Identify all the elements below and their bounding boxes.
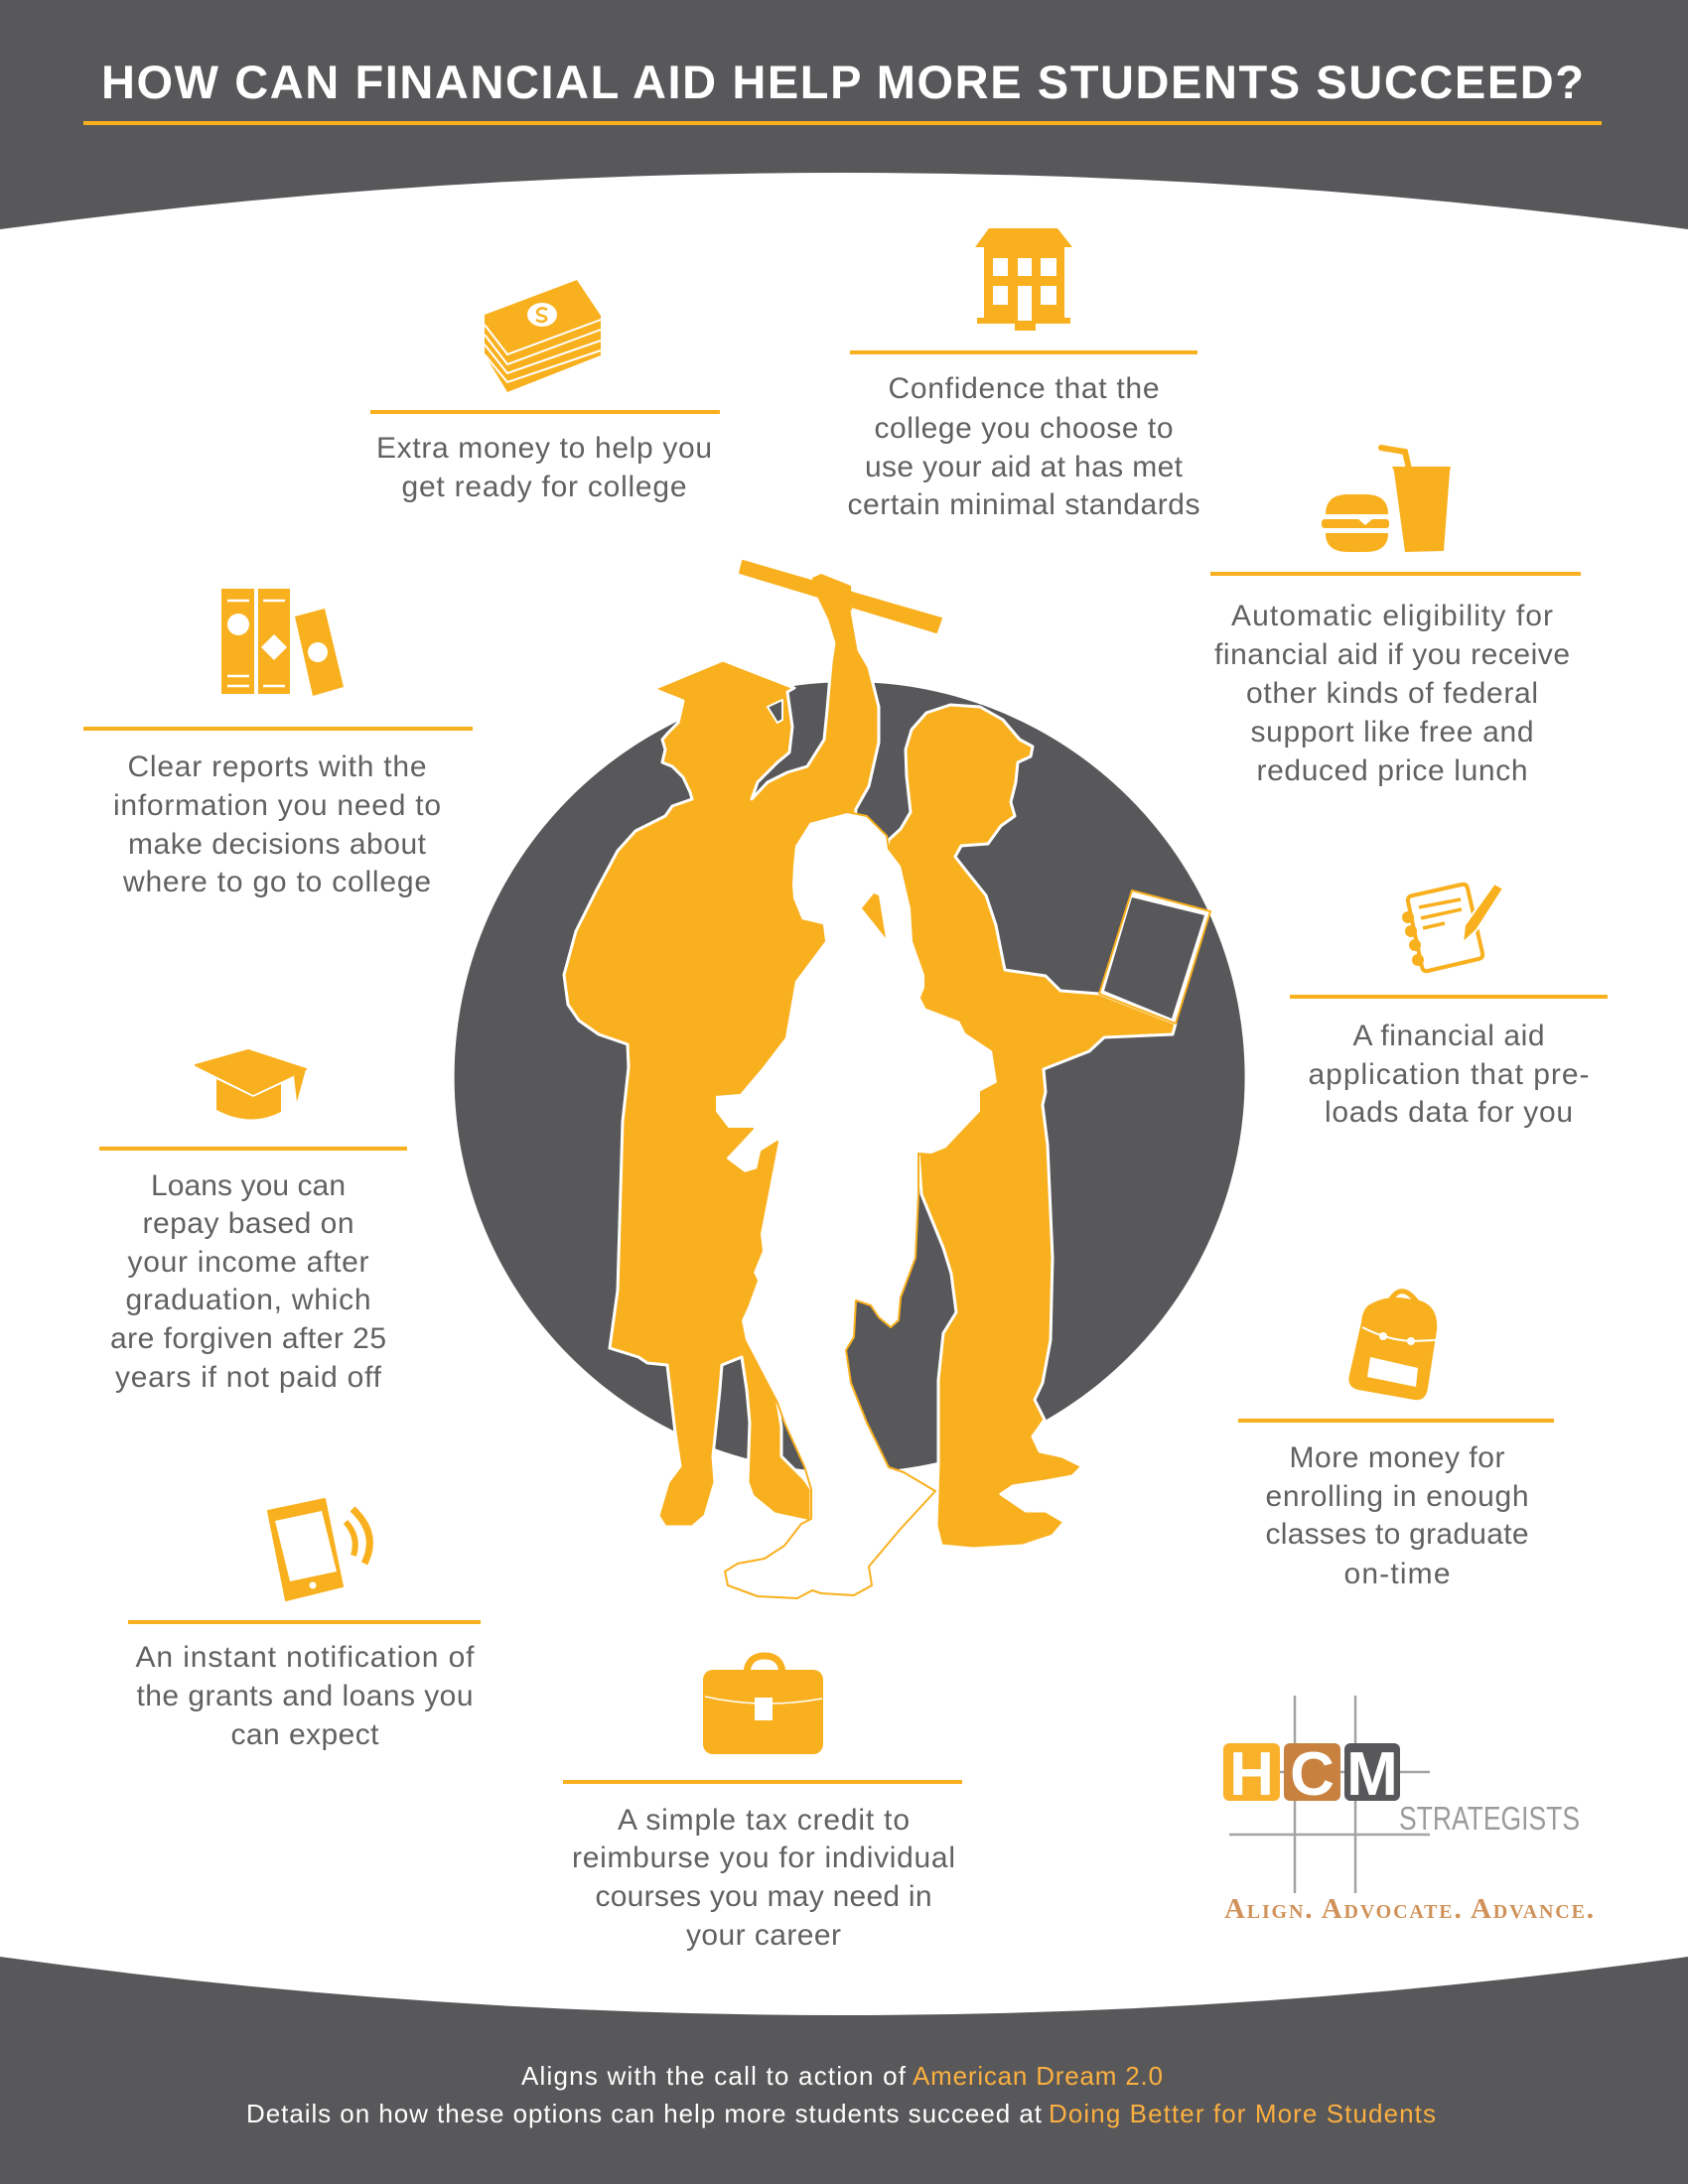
item: accredited college: [848, 228, 1199, 521]
text: eligibility: other kinds of federal: [1246, 677, 1538, 710]
footer text: Doing Better for More Students: [1049, 2099, 1436, 2128]
text: application: [1309, 1020, 1589, 1129]
text: reports: make decisions about: [128, 828, 427, 861]
item: income-based loans: [99, 1050, 407, 1394]
text: extra money: get ready for college: [401, 471, 687, 503]
icon: notepad and pencil: [1402, 884, 1503, 971]
icon: phone with signal: [268, 1499, 369, 1600]
text: application: loads data for you: [1325, 1096, 1573, 1129]
item: instant notification: [128, 1499, 481, 1751]
laptop: [1099, 890, 1210, 1024]
title: HOW CAN FINANCIAL AID HELP MORE STUDENTS SUCCEED?: [101, 56, 1584, 108]
text: enrollment: [1265, 1441, 1529, 1590]
logo: HCM Strategists: M: [1346, 1740, 1398, 1809]
footer text: Aligns with the call to action of: [521, 2061, 907, 2091]
footer text: [246, 2061, 1436, 2128]
icon: school building: [975, 228, 1072, 331]
icon: burger and drink: [1322, 448, 1451, 552]
logo: HCM Strategists: C: [1290, 1740, 1335, 1809]
text: loans: years if not paid off: [115, 1361, 382, 1394]
text: enrollment: enrolling in enough: [1265, 1480, 1529, 1513]
text: tax credit: [572, 1804, 955, 1952]
footer text: American Dream 2.0: [913, 2061, 1163, 2091]
item: on-time enrollment: [1238, 1292, 1554, 1590]
text: tax credit: A simple tax credit to: [618, 1804, 910, 1837]
text: confidence: college you choose to: [874, 412, 1174, 445]
item: tax credit: [563, 1656, 962, 1952]
logo: HCM Strategists: H: [1229, 1740, 1274, 1809]
text: reports: [113, 751, 441, 898]
text: enrollment: classes to graduate: [1265, 1518, 1529, 1551]
text: reports: Clear reports with the: [127, 751, 427, 783]
text: loans: [110, 1169, 386, 1394]
footer text: Details on how these options can help more students succeed at: [246, 2099, 1043, 2128]
text: notification: [135, 1641, 475, 1751]
text: reports: information you need to: [113, 789, 441, 822]
text: confidence: Confidence that the: [888, 372, 1160, 405]
logo: HCM Strategists: STRATEGISTS: [1399, 1800, 1580, 1837]
central illustration: students on gray circle: [455, 561, 1245, 1598]
text: eligibility: reduced price lunch: [1257, 754, 1527, 787]
text: confidence: [848, 372, 1199, 521]
icon: stack of money: [485, 280, 601, 392]
icon: binders: [221, 589, 344, 696]
text: application: application that pre-: [1309, 1058, 1589, 1091]
text: extra money: [376, 432, 712, 503]
text: tax credit: courses you may need in: [596, 1880, 931, 1913]
text: loans: Loans you can: [151, 1169, 346, 1202]
item: clear reports: [83, 589, 473, 898]
text: confidence: use your aid at has met: [865, 451, 1184, 483]
text: eligibility: Automatic eligibility for: [1231, 600, 1553, 632]
text: loans: graduation, which: [125, 1284, 371, 1316]
text: loans: repay based on: [143, 1207, 353, 1240]
text: tax credit: reimburse you for individual: [572, 1842, 955, 1874]
item: automatic eligibility: [1210, 448, 1581, 787]
text: tax credit: your career: [686, 1919, 841, 1952]
text: loans: are forgiven after 25: [110, 1322, 386, 1355]
standing man silhouette: [879, 705, 1176, 1549]
item: extra money: [370, 280, 720, 503]
text: eligibility: financial aid if you receive: [1214, 638, 1570, 671]
text: enrollment: on-time: [1344, 1558, 1450, 1590]
text: enrollment: More money for: [1289, 1441, 1505, 1474]
text: reports: where to go to college: [122, 866, 431, 898]
logo: HCM Strategists: Align. Advocate. Advance.: [1224, 1893, 1594, 1925]
icon: briefcase: [703, 1656, 823, 1754]
text: eligibility: [1214, 600, 1570, 787]
logo: HCM Strategists: [1223, 1696, 1594, 1925]
text: confidence: certain minimal standards: [848, 488, 1199, 521]
text: notification: An instant notification of: [135, 1641, 475, 1674]
text: notification: the grants and loans you: [137, 1680, 473, 1712]
text: application: A financial aid: [1352, 1020, 1545, 1052]
graduate silhouette: [564, 561, 941, 1527]
text: notification: can expect: [230, 1718, 379, 1751]
icon: backpack: [1348, 1292, 1437, 1400]
item: pre-loaded application: [1290, 884, 1608, 1129]
text: eligibility: support like free and: [1251, 716, 1533, 749]
text: extra money: Extra money to help you: [376, 432, 712, 465]
icon: graduation cap: [196, 1050, 306, 1120]
girl silhouette in white: [715, 812, 998, 1598]
text: loans: your income after: [127, 1246, 369, 1279]
